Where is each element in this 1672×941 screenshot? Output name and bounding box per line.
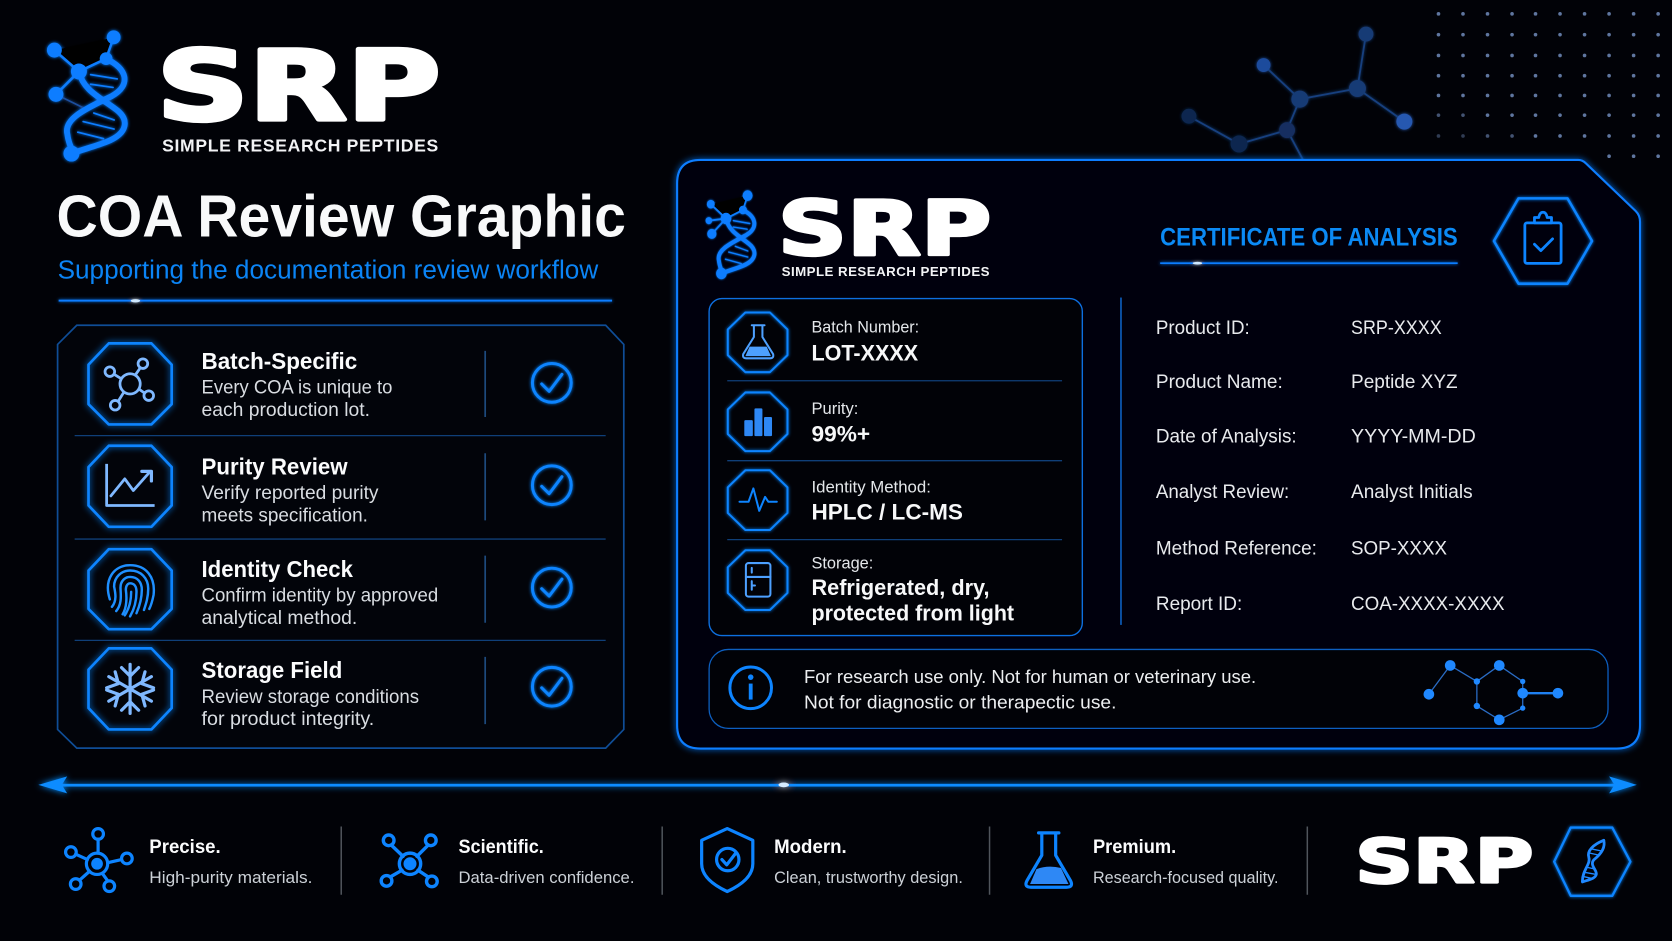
wordmark: SRP — [157, 30, 440, 142]
field text: Batch Number: — [811, 318, 919, 337]
product details table: Product Name: — [1156, 372, 1283, 393]
product details table: Date of Analysis: — [1156, 427, 1297, 448]
footer item: scientific — [381, 835, 634, 887]
icon: check — [532, 466, 571, 505]
icon: DNA helix small — [706, 190, 754, 279]
row: identity check — [89, 549, 571, 629]
icon: flask — [728, 312, 787, 372]
icon: refrigerator — [728, 550, 787, 610]
product details table: SRP-XXXX — [1351, 318, 1442, 339]
field text: Identity Method: — [811, 478, 931, 497]
product details table: Analyst Initials — [1351, 482, 1473, 503]
row text: Every COA is unique to — [202, 378, 392, 399]
row: batch number — [728, 312, 919, 372]
row: identity method — [728, 470, 963, 530]
product details table — [1156, 318, 1505, 615]
row text: Confirm identity by approved — [202, 585, 438, 606]
field text: Storage: — [811, 553, 873, 572]
row text: for product integrity. — [202, 709, 374, 730]
icon: bars — [728, 392, 787, 451]
item text — [149, 837, 312, 887]
logo: SRP header — [47, 30, 440, 162]
field text: LOT-XXXX — [811, 340, 918, 365]
card frame — [677, 160, 1640, 749]
row text: each production lot. — [202, 400, 370, 421]
card tagline: SIMPLE RESEARCH PEPTIDES — [782, 264, 990, 279]
callout: research use notice — [709, 649, 1608, 728]
field text: Refrigerated, dry, — [811, 575, 990, 600]
product details table: SOP-XXXX — [1351, 539, 1447, 560]
icon: flask — [1026, 833, 1072, 887]
row text: Purity Review — [202, 454, 348, 480]
icon: fingerprint — [89, 549, 172, 629]
row: purity review — [89, 446, 571, 527]
product details table: Report ID: — [1156, 594, 1242, 615]
row text — [202, 657, 419, 730]
row: purity — [728, 392, 870, 451]
row: storage — [728, 550, 1015, 626]
notice text — [804, 667, 1256, 713]
row text — [202, 454, 379, 526]
row text — [202, 348, 392, 421]
icon: check — [532, 568, 571, 607]
icon: node cross — [381, 835, 437, 887]
item text — [1093, 837, 1279, 887]
card logo — [706, 185, 991, 279]
row text: Identity Check — [202, 556, 354, 582]
icon: check — [532, 363, 571, 402]
footer wordmark: SRP — [1355, 827, 1533, 897]
footer: value strip — [66, 826, 1630, 897]
icon: info — [730, 667, 771, 709]
item text: Scientific. — [459, 837, 544, 858]
icon: molecule — [1424, 660, 1563, 725]
molecule decoration top right — [1181, 27, 1412, 160]
subtitle: Supporting the documentation review workflow — [58, 256, 599, 284]
title divider line with flare — [59, 299, 612, 302]
field text: protected from light — [811, 601, 1015, 626]
double-headed arrow divider — [38, 776, 1637, 793]
panel: review checklist — [58, 325, 624, 748]
row text: Storage Field — [202, 657, 342, 683]
heading: certificate of analysis: CERTIFICATE OF ANALYSIS — [1160, 224, 1458, 251]
product details table: Analyst Review: — [1156, 482, 1289, 503]
icon: pulse — [728, 470, 787, 530]
row text: Batch-Specific — [202, 348, 357, 374]
icon: molecule hub — [66, 829, 132, 892]
field text: Purity: — [811, 399, 858, 418]
panel: certificate card — [677, 160, 1640, 749]
item text — [459, 837, 634, 887]
item text: High-purity materials. — [149, 868, 312, 887]
product details table: COA-XXXX-XXXX — [1351, 594, 1505, 615]
item text: Research-focused quality. — [1093, 868, 1279, 887]
icon: chart — [89, 446, 172, 527]
item text: Precise. — [149, 837, 221, 858]
product details table: Peptide XYZ — [1351, 372, 1458, 393]
icon: shield — [702, 829, 753, 892]
icon: check — [532, 667, 571, 706]
product details table: YYYY-MM-DD — [1351, 427, 1476, 448]
vertical divider — [1120, 298, 1122, 625]
card wordmark: SRP — [778, 185, 991, 272]
item text: Clean, trustworthy design. — [774, 868, 963, 887]
dot grid decoration — [1437, 12, 1660, 158]
row text: Verify reported purity — [202, 483, 379, 504]
icon: DNA hexagon badge — [1554, 828, 1630, 896]
product details table: Method Reference: — [1156, 539, 1317, 560]
title: COA Review Graphic — [57, 183, 626, 250]
row: batch-specific — [89, 343, 571, 424]
icon: DNA helix — [47, 30, 125, 162]
row: storage field — [89, 648, 571, 730]
item text: Premium. — [1093, 837, 1176, 858]
heading underline — [1160, 262, 1458, 264]
product details table: Product ID: — [1156, 318, 1250, 339]
item text — [774, 837, 963, 887]
item text: Modern. — [774, 837, 847, 858]
panel: batch details — [709, 299, 1082, 636]
field text: 99%+ — [811, 421, 870, 446]
row text: analytical method. — [202, 608, 357, 629]
field text — [811, 553, 1015, 626]
panel frame — [58, 325, 624, 748]
field text — [811, 399, 870, 446]
field text — [811, 478, 963, 524]
notice text: For research use only. Not for human or veterinary use. — [804, 667, 1256, 687]
icon: clipboard badge — [1494, 198, 1592, 284]
row text — [202, 556, 438, 629]
footer item: premium — [1026, 833, 1279, 887]
row text: meets specification. — [202, 505, 368, 526]
notice text: Not for diagnostic or therapectic use. — [804, 693, 1116, 713]
footer item: precise — [66, 829, 312, 892]
row text: Review storage conditions — [202, 687, 419, 708]
tagline: SIMPLE RESEARCH PEPTIDES — [162, 135, 439, 155]
footer item: modern — [702, 829, 963, 892]
field text: HPLC / LC-MS — [811, 499, 963, 524]
field text — [811, 318, 919, 365]
item text: Data-driven confidence. — [459, 868, 634, 887]
icon: network — [89, 343, 172, 424]
icon: snowflake — [89, 648, 172, 729]
